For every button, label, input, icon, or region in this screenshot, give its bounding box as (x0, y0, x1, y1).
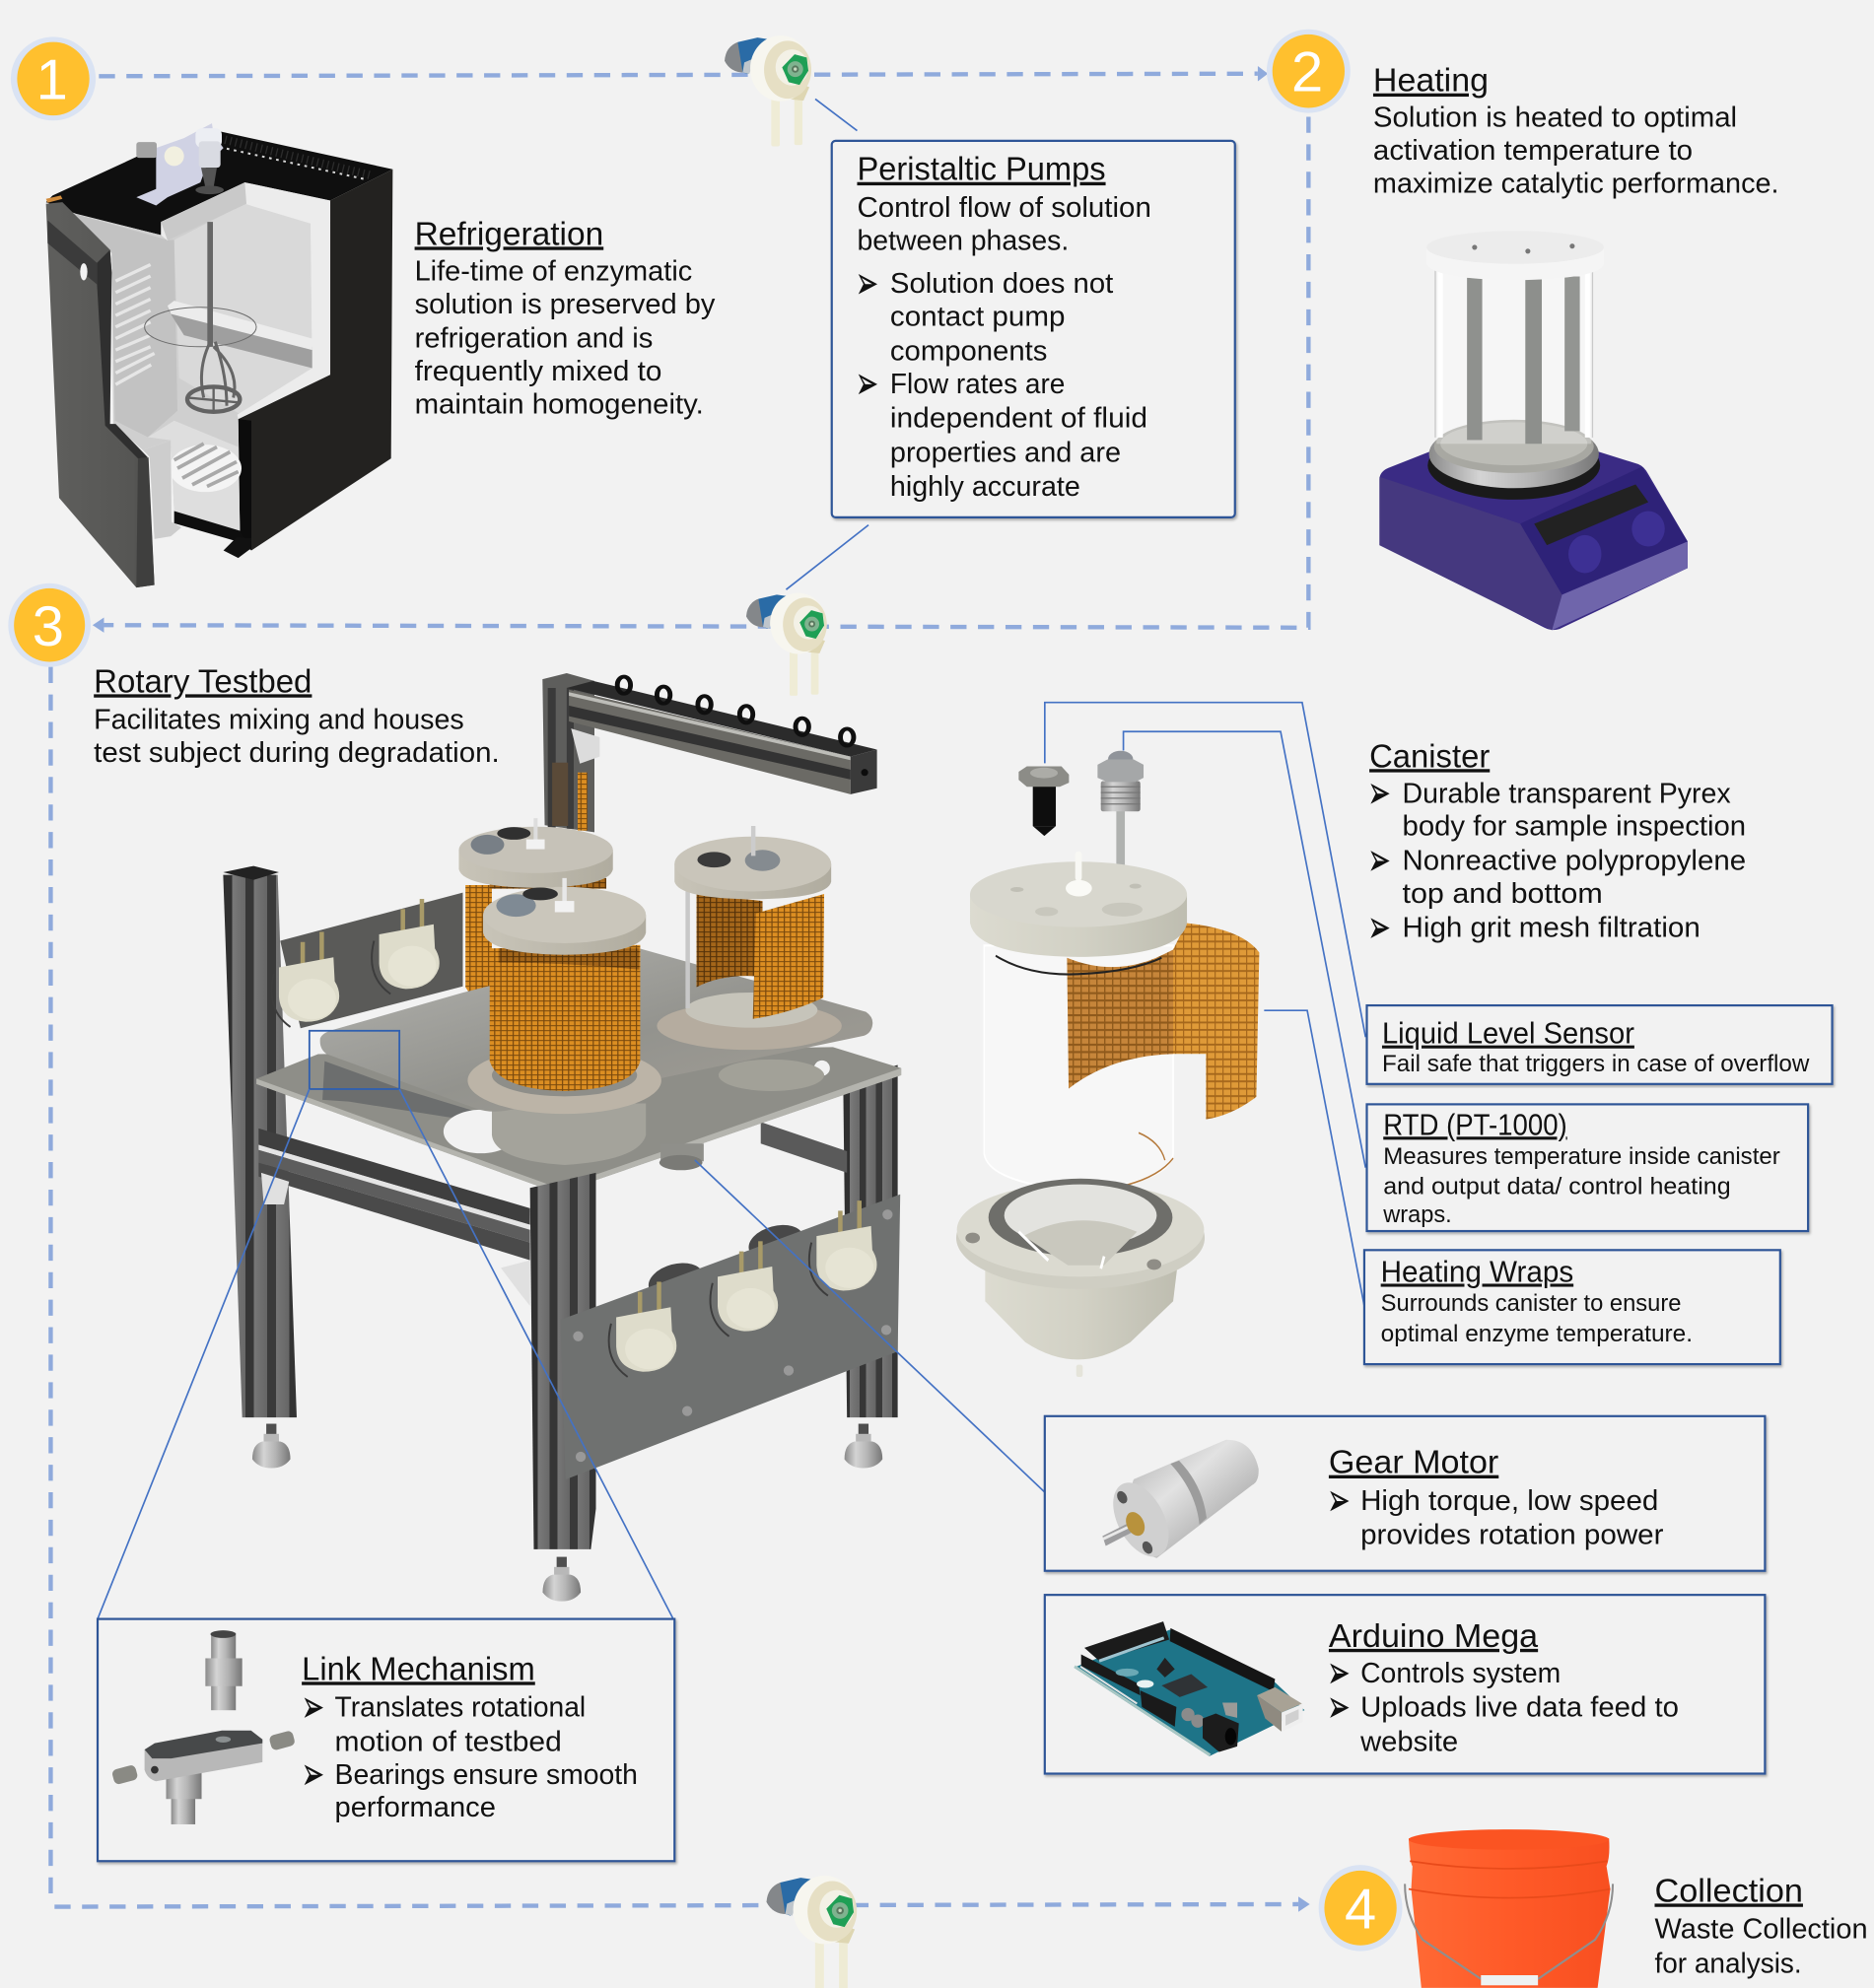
body: Nonreactive polypropylene (1403, 844, 1746, 875)
front post (530, 1173, 596, 1549)
step 3 badge: 3 (33, 595, 64, 658)
pump motors behind panel (645, 1219, 807, 1304)
collection text (1654, 1873, 1868, 1978)
body: Durable transparent Pyrex (1403, 777, 1731, 808)
flow line: 1 to 2 (99, 66, 1268, 81)
body: components (890, 334, 1047, 366)
body: Waste Collection (1654, 1913, 1868, 1945)
panel: RTD: RTD (PT-1000) (1383, 1107, 1567, 1141)
orange bucket (1405, 1829, 1613, 1988)
panel: liquid level sensor: Liquid Level Sensor (1382, 1016, 1634, 1051)
rear canister (444, 818, 613, 1036)
connector: heating wraps (1264, 1010, 1364, 1306)
heading: Canister (1369, 738, 1490, 775)
body: contact pump (890, 301, 1065, 332)
right post (843, 1065, 898, 1417)
funnel base (956, 1179, 1205, 1377)
step 1 badge (11, 36, 96, 120)
body (1654, 1913, 1868, 1978)
rear pump panel (271, 893, 462, 1028)
gear motor underside (659, 1143, 704, 1170)
icon: link block (111, 1730, 296, 1824)
panel: gear motor (1045, 1416, 1765, 1571)
front foot (542, 1557, 581, 1602)
panel: peristaltic pumps (832, 141, 1235, 517)
step 4 badge: 4 (1345, 1878, 1376, 1941)
under-plate bowl (492, 1103, 646, 1165)
body: solution is preserved by (415, 288, 716, 319)
body (1370, 777, 1746, 943)
connector: gear motor (695, 1160, 1045, 1492)
step 4 badge (1319, 1865, 1403, 1952)
icon: link shaft (205, 1630, 243, 1710)
body: properties and are (890, 436, 1121, 467)
body: activation temperature to (1373, 134, 1693, 166)
canister text (1369, 738, 1746, 943)
panel: RTD: Measures temperature inside canister (1383, 1143, 1780, 1170)
panel: RTD: wraps. (1382, 1201, 1452, 1228)
right canister (657, 826, 842, 1050)
left foot (252, 1424, 291, 1469)
panel: heating wraps: Heating Wraps (1381, 1254, 1573, 1288)
body: highly accurate (890, 470, 1080, 502)
heading: Rotary Testbed (94, 663, 312, 700)
body (94, 704, 500, 768)
pump icon top (725, 35, 811, 146)
fridge illustration (46, 123, 392, 587)
panel: link mechanism: Link Mechanism (302, 1651, 535, 1687)
panel: RTD: and output data/ control heating (1383, 1174, 1731, 1200)
connector: liquid level sensor (1045, 703, 1365, 1037)
heading: Collection (1654, 1873, 1803, 1909)
body: refrigeration and is (415, 322, 653, 354)
step 2 badge: 2 (1291, 41, 1323, 104)
panel: gear motor: High torque, low speed (1360, 1484, 1658, 1516)
plate front edge (256, 1068, 901, 1194)
connector: RTD (1124, 731, 1365, 1168)
body: Solution is heated to optimal (1373, 102, 1737, 133)
connector: pump to box (815, 99, 857, 131)
panel: gear motor: provides rotation power (1360, 1519, 1663, 1550)
connector: box to pump (786, 525, 868, 589)
body: maximize catalytic performance. (1373, 168, 1779, 199)
body: independent of fluid (890, 402, 1147, 434)
flow line: 2 to 3 (93, 116, 1308, 633)
step 1 badge: 1 (36, 48, 68, 111)
panel: link mechanism: Translates rotational (335, 1691, 586, 1723)
panel: link mechanism (98, 1619, 674, 1861)
panel: heating wraps: Surrounds canister to ensure (1381, 1290, 1681, 1317)
right foot (845, 1424, 882, 1469)
heating wrap (1067, 923, 1259, 1120)
body: body for sample inspection (1403, 810, 1746, 842)
icon: arduino board (1074, 1621, 1304, 1756)
body: test subject during degradation. (94, 736, 500, 768)
panel: heating wraps (1364, 1250, 1780, 1364)
body: Solution does not (890, 267, 1113, 299)
exploded canister illustration (956, 751, 1259, 1377)
canister lid (970, 852, 1187, 957)
rotary testbed illustration (223, 673, 901, 1602)
heading: Refrigeration (415, 216, 603, 252)
body: maintain homogeneity. (415, 387, 704, 419)
body: Flow rates are (890, 368, 1065, 399)
rails (258, 1122, 847, 1306)
rear post and top bar (542, 673, 877, 832)
panel: arduino mega: Arduino Mega (1329, 1618, 1539, 1655)
pump icon middle (746, 592, 827, 696)
panel: arduino mega (1045, 1595, 1765, 1774)
body: Facilitates mixing and houses (94, 704, 464, 735)
panel: link mechanism: performance (335, 1791, 496, 1822)
lower table plate (256, 1047, 901, 1194)
glass body (984, 945, 1173, 1191)
RTD probe (1097, 751, 1144, 892)
panel: liquid level sensor: Fail safe that triggers in case of overflow (1382, 1051, 1810, 1077)
body: Control flow of solution (857, 191, 1151, 223)
front canister (467, 878, 661, 1114)
icon: gear motor (1102, 1440, 1259, 1566)
pump icon bottom (767, 1876, 857, 1988)
connector: link mechanism (98, 1089, 673, 1619)
flow line: 3 to 4 (50, 667, 1310, 1912)
heading: Heating (1373, 63, 1489, 100)
body (1373, 102, 1779, 199)
body: Life-time of enzymatic (415, 254, 692, 286)
panel: gear motor: Gear Motor (1329, 1445, 1498, 1481)
body: High grit mesh filtration (1403, 912, 1700, 943)
o-ring (996, 956, 1161, 975)
panel: link mechanism: motion of testbed (335, 1725, 562, 1756)
panel: heating wraps: optimal enzyme temperature. (1381, 1321, 1693, 1347)
body: frequently mixed to (415, 355, 661, 386)
body: between phases. (857, 225, 1069, 256)
table plates and canisters (256, 818, 901, 1194)
step 3 badge (8, 583, 91, 667)
copper wire (1070, 1132, 1173, 1193)
level sensor (1018, 767, 1069, 836)
plate holes (444, 1110, 519, 1153)
body (415, 254, 716, 419)
heating text (1373, 63, 1779, 199)
left post (223, 866, 297, 1417)
panel: link mechanism: Bearings ensure smooth (335, 1758, 638, 1790)
body: for analysis. (1654, 1947, 1802, 1978)
heading: Peristaltic Pumps (857, 152, 1106, 188)
body: top and bottom (1403, 877, 1603, 909)
rotary testbed text (94, 663, 500, 768)
step 2 badge (1267, 30, 1351, 113)
link highlight box (310, 1031, 399, 1089)
refrigeration text (415, 216, 716, 419)
panel: liquid level sensor (1367, 1005, 1833, 1084)
body (857, 191, 1151, 502)
panel: RTD (1367, 1104, 1808, 1231)
stir plate with canister (1379, 231, 1688, 630)
panel: arduino mega: website (1359, 1725, 1458, 1756)
panel: arduino mega: Uploads live data feed to (1360, 1691, 1679, 1723)
upper table plate (320, 948, 872, 1112)
panel: arduino mega: Controls system (1360, 1657, 1561, 1688)
plate underside shadow (322, 1062, 490, 1118)
front pump panel (560, 1195, 900, 1479)
